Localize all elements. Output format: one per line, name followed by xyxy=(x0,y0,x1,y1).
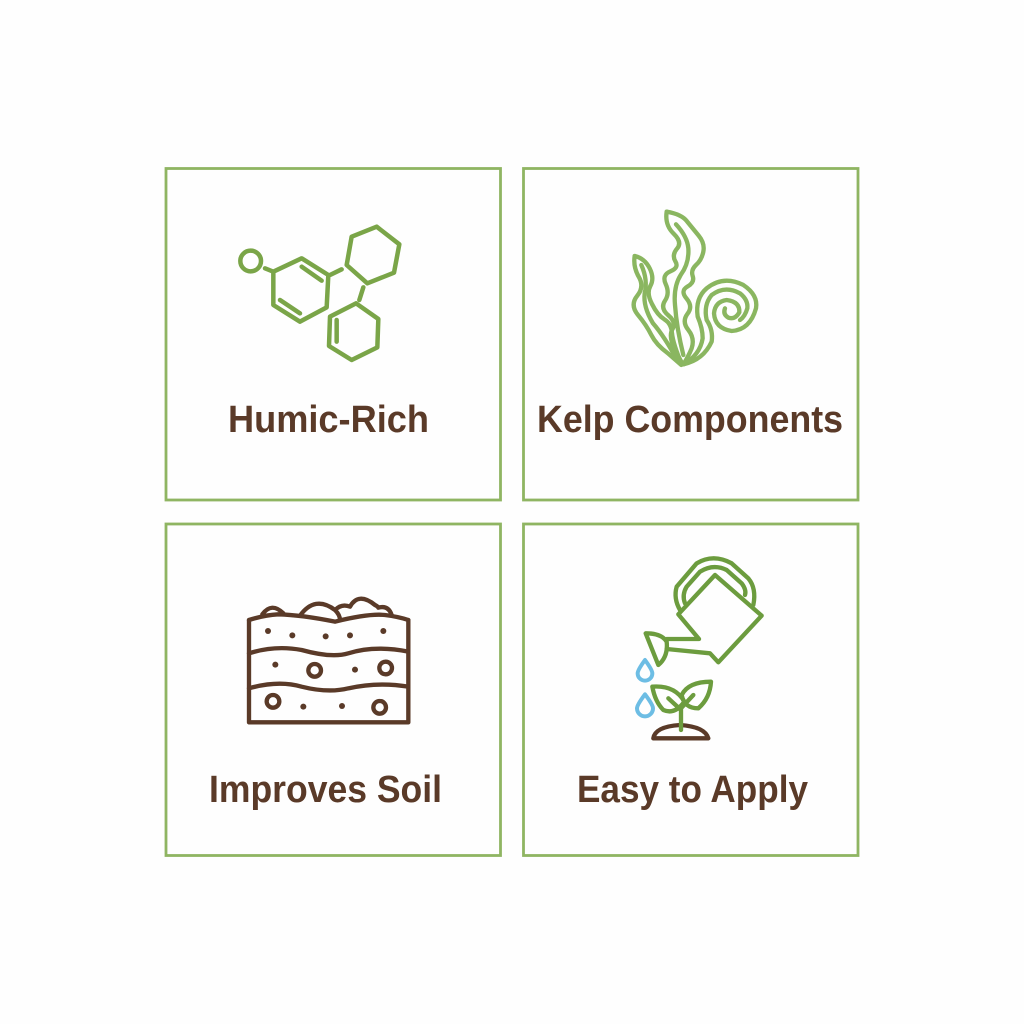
panel: easy to apply xyxy=(524,524,858,856)
heading: kelp components: Kelp Components xyxy=(537,399,843,441)
icon: watering can and seedling xyxy=(637,558,762,738)
panel: kelp components xyxy=(524,168,858,500)
icon: kelp xyxy=(634,212,756,365)
heading: improves soil: Improves Soil xyxy=(209,769,442,811)
heading: humic-rich: Humic-Rich xyxy=(228,399,429,441)
icon: soil layers xyxy=(249,599,408,722)
panel: humic-rich xyxy=(166,168,500,500)
icon: molecule xyxy=(240,227,399,360)
heading: easy to apply: Easy to Apply xyxy=(577,769,808,811)
panel: improves soil xyxy=(166,524,500,856)
